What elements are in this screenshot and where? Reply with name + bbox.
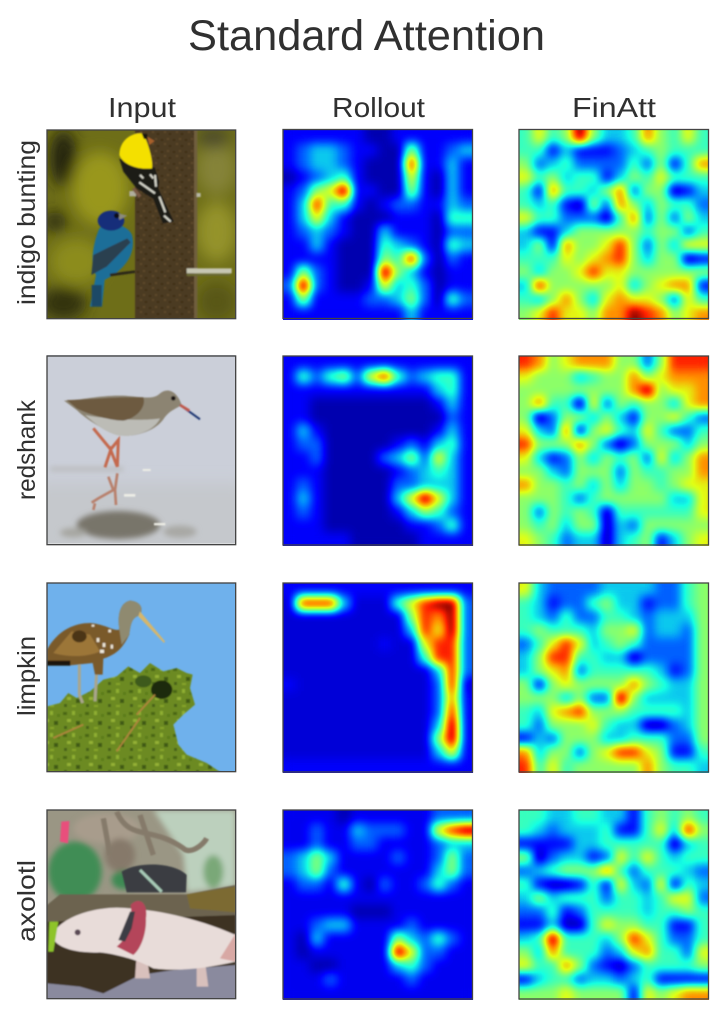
title: Standard Attention: [188, 12, 545, 60]
panel: input photo, indigo bunting: [40, 128, 237, 322]
panel: finatt heatmap, limpkin: [519, 583, 709, 773]
panel: input photo, limpkin: [47, 583, 236, 773]
panel: rollout heatmap, redshank: [283, 356, 473, 546]
row label: indigo bunting: indigo bunting: [13, 140, 41, 305]
column heading: Rollout: Rollout: [332, 92, 425, 123]
panel: input photo, axolotl: [47, 810, 236, 1000]
icon: redshank bird: [64, 391, 200, 467]
icon: feeder post: [135, 128, 197, 320]
frames: heatmap axes: [283, 130, 708, 999]
icon: perch: [129, 191, 232, 276]
icon: goldfinch: [119, 133, 174, 223]
icon: gravel: [47, 965, 236, 1000]
panel: rollout heatmap, axolotl: [283, 810, 473, 1000]
row label: limpkin: limpkin: [13, 636, 41, 716]
icon: branches and rock: [60, 812, 207, 892]
icon: log: [47, 885, 236, 922]
column heading: FinAtt: FinAtt: [572, 92, 656, 123]
icon: reflection of legs: [92, 473, 117, 510]
panel: finatt heatmap, indigo bunting: [519, 130, 709, 320]
icon: indigo bunting: [90, 211, 135, 307]
panel: rollout heatmap, indigo bunting: [283, 130, 473, 320]
row label: axolotl: axolotl: [13, 860, 41, 942]
icon: axolotl body: [48, 901, 236, 987]
panel: input photo, redshank: [46, 355, 236, 546]
panel: rollout heatmap, limpkin: [283, 583, 473, 773]
panel: finatt heatmap, redshank: [519, 356, 709, 546]
column heading: Input: Input: [108, 92, 176, 123]
panel: finatt heatmap, axolotl: [519, 810, 709, 1000]
row label: redshank: redshank: [13, 400, 41, 500]
icon: tree: [47, 663, 222, 773]
icon: limpkin bird: [47, 601, 165, 703]
